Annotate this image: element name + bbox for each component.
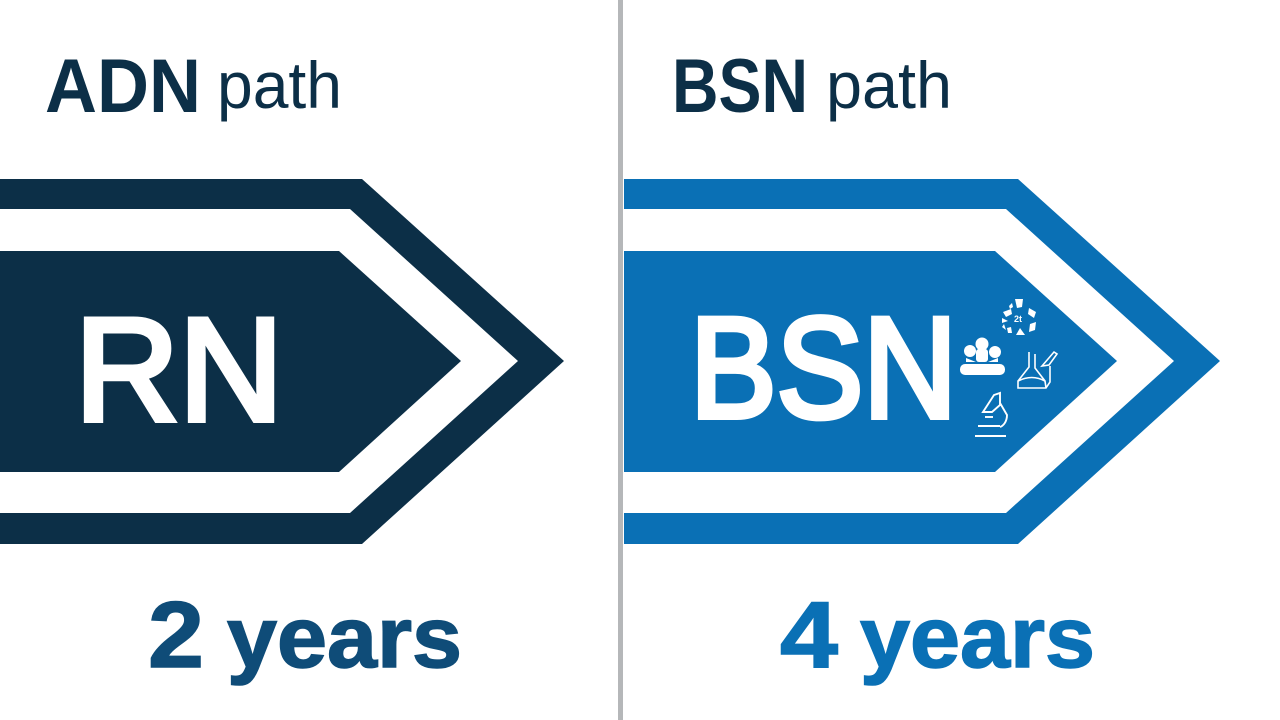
heading: ADN path [45, 44, 342, 129]
heading: BSN path: path [826, 48, 952, 122]
arrow body: RN [0, 251, 461, 472]
icon: radial burst [1002, 299, 1036, 335]
panel: ADN path [0, 44, 564, 687]
arrow body: BSN: BSN [690, 289, 957, 448]
icon: flask and pencil [1018, 352, 1057, 388]
icon: people group [960, 338, 1005, 375]
panel: BSN path [624, 44, 1220, 687]
vertical divider [618, 0, 623, 720]
duration: 2 years [148, 582, 462, 687]
arrow outline: BSN [624, 179, 1220, 544]
heading: BSN path [672, 44, 952, 129]
icon: microscope [975, 393, 1007, 436]
duration: 4 years: years [860, 590, 1095, 686]
duration: 2 years: 2 [148, 582, 204, 687]
heading: ADN path: path [217, 48, 342, 122]
duration: 4 years: 4 [780, 582, 838, 687]
duration: 2 years: years [227, 590, 462, 686]
heading: BSN path: BSN [672, 44, 808, 129]
arrow body: BSN [624, 251, 1117, 472]
duration: 4 years [780, 582, 1095, 687]
icon: radial burst: 2t [1014, 314, 1022, 324]
arrow outline: ADN [0, 179, 564, 544]
heading: ADN path: ADN [45, 44, 201, 129]
arrow body: RN: RN [75, 288, 283, 451]
